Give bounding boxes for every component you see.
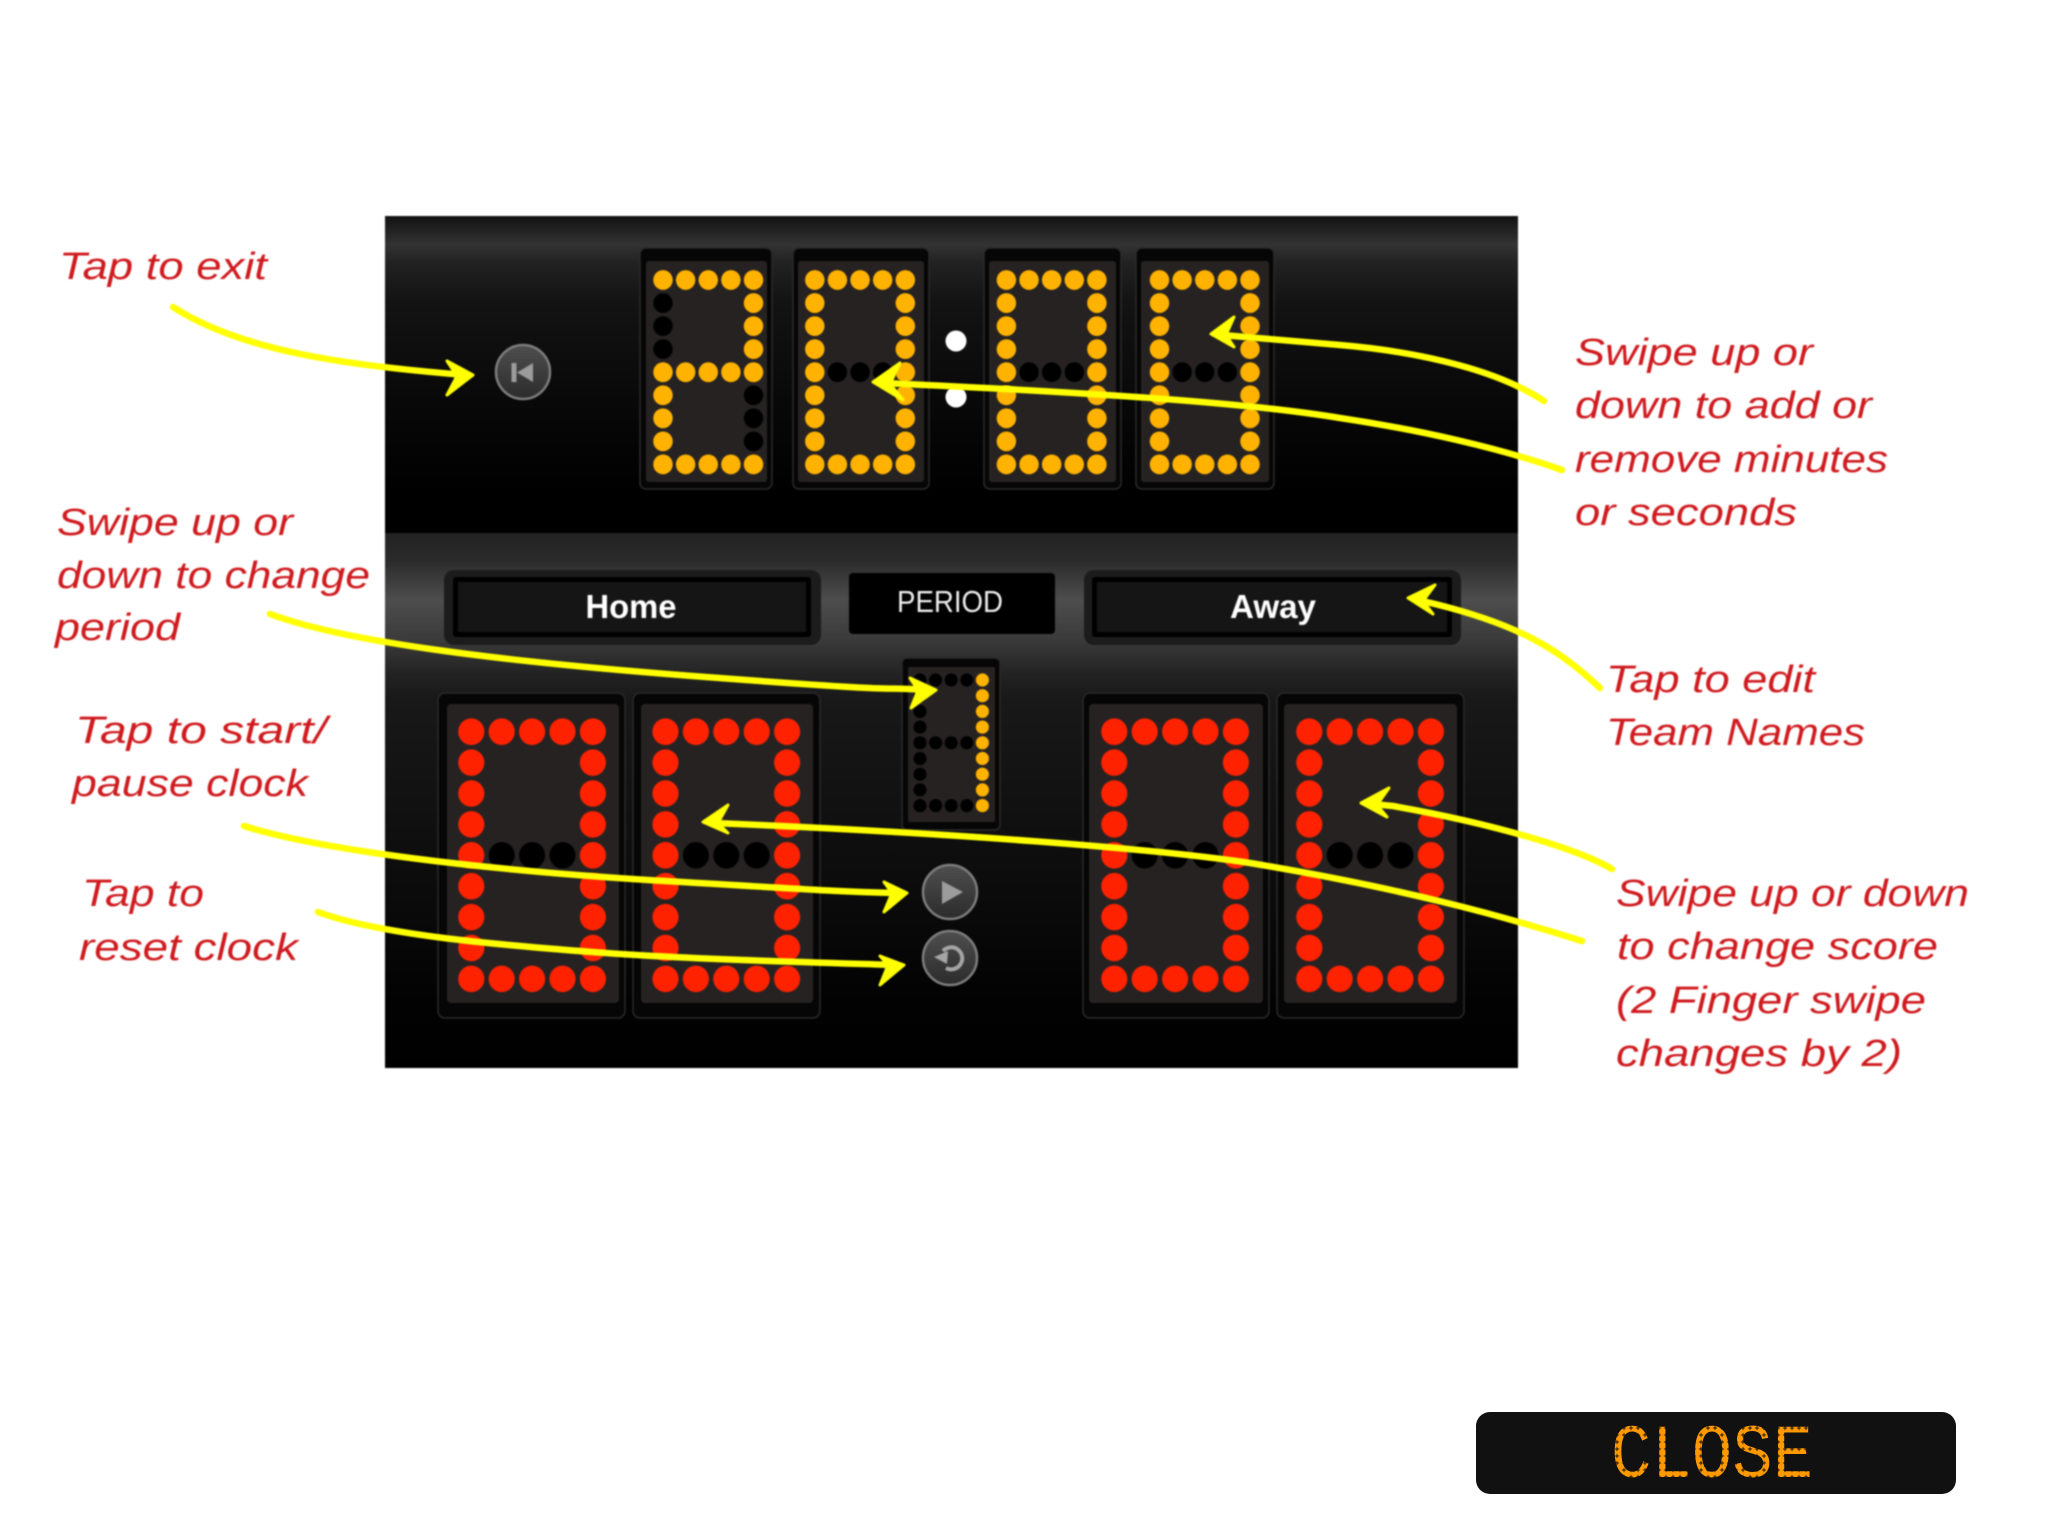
note: minutes or seconds	[1575, 332, 1888, 534]
note: edit team names	[1606, 659, 1865, 754]
arrow: seconds	[1211, 317, 1544, 401]
home score digit 2	[633, 693, 820, 1018]
note: reset clock	[79, 873, 300, 969]
icon: play button	[923, 865, 977, 919]
home team name box: Home	[586, 588, 676, 625]
note: tap to exit: Tap to exit	[59, 246, 269, 288]
close button	[1476, 1412, 1956, 1500]
arrow: tap to exit	[173, 307, 473, 395]
note: change score: changes by 2)	[1616, 1033, 1902, 1075]
note: minutes or seconds: remove minutes	[1575, 439, 1888, 481]
arrow: reset clock	[318, 912, 904, 985]
away score digit 1	[1083, 693, 1269, 1018]
away team name box: Away	[1230, 588, 1317, 625]
note: minutes or seconds: or seconds	[1575, 492, 1797, 534]
clock digit 4: 0	[1136, 248, 1274, 489]
note: minutes or seconds: Swipe up or	[1575, 332, 1815, 374]
note: change score: (2 Finger swipe	[1616, 980, 1926, 1022]
note: change score	[1616, 873, 1969, 1075]
clock colon	[946, 330, 966, 408]
clock digit 1: 2	[640, 248, 772, 489]
note: reset clock: reset clock	[79, 927, 300, 969]
arrow: away score	[1361, 788, 1612, 869]
arrow: start or pause clock	[244, 826, 907, 912]
note: change period: period	[54, 607, 182, 649]
note: start or pause clock	[71, 710, 331, 805]
note: change score: to change score	[1617, 926, 1938, 968]
close button: CLOSE	[1611, 1414, 1813, 1500]
panel: clock band	[385, 216, 1518, 533]
note: reset clock: Tap to	[82, 873, 204, 915]
arrow: change period	[270, 614, 936, 708]
period digit: 1	[902, 658, 1000, 830]
arrow: home score	[703, 805, 1582, 941]
arrow: minutes	[873, 363, 1562, 470]
home score digit 1	[438, 693, 625, 1018]
away score digit 2	[1277, 693, 1464, 1018]
period label box: PERIOD	[897, 584, 1003, 619]
note: change period: down to change	[57, 555, 370, 597]
clock digit 2: 0	[793, 248, 929, 489]
icon: reset button	[923, 931, 977, 985]
note: change period: Swipe up or	[57, 502, 295, 544]
note: edit team names: Team Names	[1606, 712, 1865, 754]
panel: scoreboard	[385, 216, 1518, 1068]
clock digit 3: 0	[984, 248, 1121, 489]
note: change score: Swipe up or down	[1616, 873, 1969, 915]
note: change period	[54, 502, 370, 649]
home team name box	[444, 570, 821, 645]
period label box	[849, 573, 1055, 634]
note: start or pause clock: pause clock	[71, 763, 310, 805]
panel: team and score band	[385, 533, 1518, 1068]
arrow: edit team names	[1408, 585, 1600, 688]
note: edit team names: Tap to edit	[1606, 659, 1817, 701]
note: start or pause clock: Tap to start/	[75, 710, 331, 752]
icon: exit button	[496, 345, 550, 399]
away team name box	[1084, 570, 1461, 645]
note: minutes or seconds: down to add or	[1575, 385, 1874, 427]
